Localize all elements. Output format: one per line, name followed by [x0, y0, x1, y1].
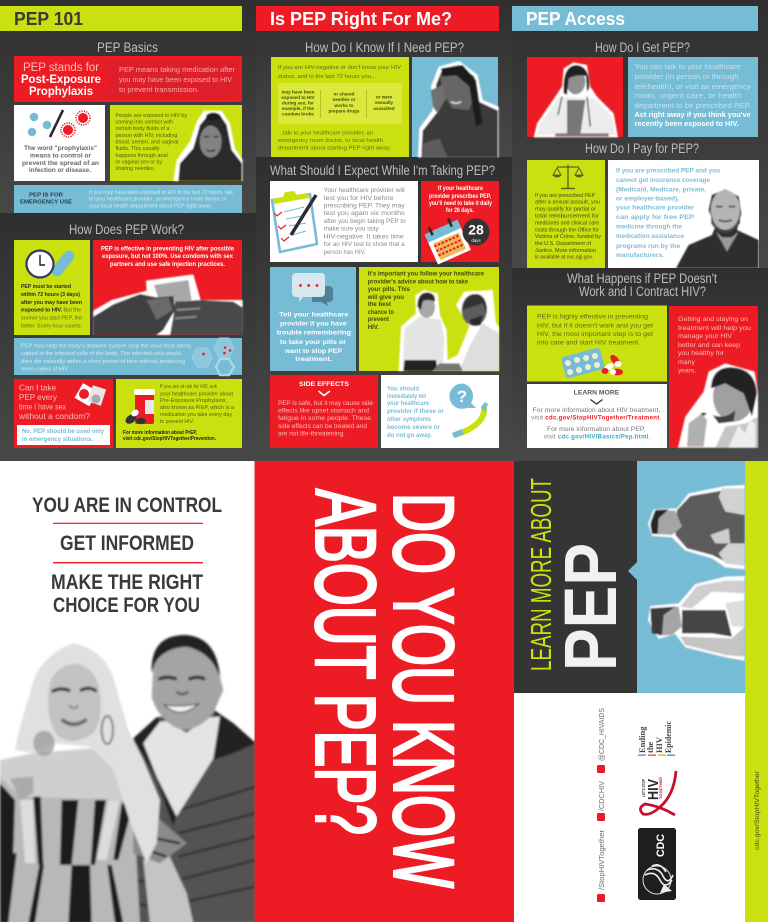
panel: side effects: are not life-threatening.	[278, 430, 345, 438]
panel: meaning of prophylaxis: prevent the spread of an	[22, 160, 99, 167]
panel: PrEP information: medication you take every day	[160, 412, 232, 418]
panel: side effects: PEP is safe, but it may cause side	[278, 400, 374, 407]
panel: sexual assault reimbursement: after a sexual assault, you	[535, 200, 600, 206]
panel: immune system: more copies of HIV.	[21, 366, 69, 372]
panel: 28 days: If your healthcare	[438, 186, 484, 192]
panel: staying on treatment	[669, 306, 758, 448]
panel: how do I know: may have been	[282, 90, 315, 94]
panel: how people are exposed: fluids. This usually	[116, 146, 160, 152]
text block: empowerment messages	[32, 494, 222, 617]
panel: tell provider about symptoms: become severe or	[387, 424, 441, 431]
heading: How Do I Know If I Need PEP?: How Do I Know If I Need PEP?	[305, 40, 464, 55]
panel: how people are exposed: blood, semen, and vaginal	[116, 140, 178, 146]
panel: effective but not 100 percent: PEP is effective in preventing HIV after possible	[101, 246, 234, 252]
panel: PEP stands for: PEP means taking medication after	[119, 67, 236, 74]
icon: condom packets	[75, 383, 106, 406]
panel: staying on treatment: you healthy for	[678, 350, 725, 357]
panel: 28 days: you'll need to take it daily	[429, 201, 493, 207]
icon: pill pack and capsules	[561, 347, 623, 379]
panel: how to get PEP: You can talk to your healthcare	[635, 64, 741, 71]
panel: sexual assault reimbursement: Justice. More information	[535, 248, 596, 254]
panel: do you know about PEP cover	[255, 461, 513, 922]
panel: follow provider advice: the best	[368, 301, 392, 308]
icon: chevron	[318, 391, 330, 396]
panel: testing: after you begin taking PEP to	[324, 218, 406, 225]
panel: tell provider about symptoms: You should	[387, 385, 419, 392]
panel: meaning of prophylaxis	[14, 105, 105, 181]
panel: how to get PEP: recently been exposed to HIV.	[635, 121, 739, 128]
text block: social media links: /CDCHIV	[597, 781, 606, 811]
heading: How Do I Get PEP?: How Do I Get PEP?	[595, 40, 690, 55]
panel: how do I know: or shared	[334, 92, 355, 96]
panel: PEP is for emergency use: PEP IS FOR	[29, 192, 63, 198]
icon: pill bottle and capsules	[124, 389, 155, 426]
panel: tell your provider: treatment.	[295, 356, 332, 363]
photo: two men seated	[648, 485, 745, 661]
heading: PEP 101: PEP 101	[14, 8, 83, 29]
panel: sexual assault reimbursement: Victims of Crime, funded by	[535, 234, 601, 240]
divider: red fold line	[254, 461, 256, 922]
heading: PEP Basics: PEP Basics	[97, 40, 158, 55]
panel: meaning of prophylaxis: infection or disease.	[29, 167, 91, 174]
panel: 28 days: for 28 days.	[446, 208, 474, 214]
panel: how people are exposed: person with HIV, including	[116, 133, 177, 139]
panel: staying on treatment: many	[678, 359, 696, 366]
panel: testing: Your healthcare provider will	[324, 187, 405, 194]
photo: hands exchanging a condom	[93, 274, 243, 335]
panel: free PEP medicine: medication assistance	[616, 233, 684, 240]
man shirt and head	[143, 717, 220, 817]
panel: learn more: LEARN MORE	[574, 390, 619, 396]
panel: testing	[270, 181, 418, 262]
panel: effective but not 100 percent: partners and use safe injection practices.	[110, 261, 225, 268]
background: dark panel sheet	[0, 0, 768, 461]
panel: follow provider advice: provider's advice about how to take	[368, 278, 468, 286]
heading: What Happens if PEP Doesn't Work: What Happens if PEP Doesn't	[567, 271, 717, 286]
heading: How Does PEP Work?: How Does PEP Work?	[69, 222, 184, 237]
icon: scales of justice	[553, 165, 583, 188]
panel: how do I know: assaulted	[373, 106, 395, 111]
icon: notch pointer	[628, 562, 637, 580]
heading: PEP Access	[512, 6, 758, 31]
panel: 72 hours: sooner you start PEP, the	[21, 316, 83, 322]
panel: tell provider about symptoms: do not go away.	[387, 432, 432, 439]
man jacket	[130, 709, 256, 922]
panel: sexual assault reimbursement	[527, 160, 605, 268]
panel: free PEP medicine	[608, 160, 759, 268]
panel: PEP 101	[0, 6, 243, 448]
panel: PEP stands for	[14, 56, 242, 102]
panel: PrEP information: to prevent HIV.	[160, 419, 194, 425]
heading: What Happens if PEP Doesn't Work: Work and I Contract HIV?	[579, 284, 706, 299]
panel: immune system: copied in the infected cells of the body. The infected cells would	[21, 351, 181, 357]
panel: how people are exposed: coming into contact with	[116, 120, 173, 126]
panel: PEP stands for: Prophylaxis	[29, 86, 93, 98]
panel: testing: prescribing PEP. They may	[324, 202, 406, 210]
panel: free PEP medicine: or employer-based),	[616, 196, 679, 202]
panel: side effects	[270, 375, 378, 448]
panel: how do I know: during sex, for	[282, 100, 314, 106]
panel: how do I know: status, and in the last 72 hours you...	[278, 74, 376, 80]
panel: sexual assault reimbursement: total reimbursement for	[535, 214, 599, 220]
panel: follow provider advice	[359, 267, 499, 371]
panel: follow provider advice: will give you	[367, 294, 404, 301]
panel: staying on treatment: Getting and staying on	[678, 316, 748, 323]
panel: lime side strip: cdc.gov/StopHIVTogether	[754, 770, 761, 850]
panel: follow provider advice: your pills. This	[368, 286, 410, 293]
panel: 72 hours: within 72 hours (3 days)	[20, 292, 80, 298]
panel: PrEP information: If you are at risk for HIV, ask	[160, 384, 217, 390]
panel: immune system: PEP may help the body's immune system stop the virus from being	[21, 343, 191, 349]
panel: learn more: For more information about HIV treatment,	[533, 408, 661, 414]
logo: Ending the HIV Epidemic: Epidemic	[663, 721, 673, 753]
panel: sexual assault reimbursement: If you are prescribed PEP	[535, 193, 595, 199]
logo: Ending the HIV Epidemic: HIV	[654, 736, 664, 753]
panel: free PEP medicine: manufacturers.	[616, 252, 664, 259]
panel: can I take PEP every time: Can I take	[19, 384, 57, 393]
panel: staying on treatment: manage your HIV	[678, 333, 733, 340]
title: PEP: PEP	[549, 543, 632, 671]
panel: how do I know: department about starting PEP right away.	[278, 146, 391, 152]
logo: Let's Stop HIV Together: HIV	[645, 779, 662, 800]
panel: can I take PEP every time: without a condom?	[18, 412, 91, 421]
panel: testing: person has HIV.	[324, 249, 366, 256]
icon: calendar and 28 days badge: days	[471, 238, 481, 243]
panel: get into care: PEP is highly effective in preventing	[537, 314, 648, 321]
panel: how people are exposed: sharing needles.	[116, 166, 155, 172]
panel: immune system	[14, 338, 242, 375]
panel: PrEP information: Pre-Exposure Prophylaxis,	[160, 398, 227, 404]
callout: no, emergency only: in emergency situations.	[22, 436, 93, 443]
panel: effective but not 100 percent: exposure, but not 100%. Use condoms with sex	[102, 253, 233, 260]
panel: free PEP medicine: cannot get insurance coverage	[616, 177, 710, 184]
panel: can I take PEP every time	[14, 379, 113, 448]
photo: doctor on red	[527, 57, 623, 137]
panel: how do I know: works to	[334, 103, 354, 108]
icon: clock and pill	[26, 250, 69, 278]
panel: PEP Access	[512, 6, 759, 448]
panel: you are in control cover	[0, 461, 256, 922]
text block: social media links: @CDC_HIVAIDS	[597, 708, 606, 761]
panel: 72 hours: better. Every hour counts.	[21, 324, 82, 330]
logo: Ending the HIV Epidemic: Ending	[637, 726, 647, 753]
heading: PEP Access: PEP Access	[526, 8, 625, 29]
panel: sexual assault reimbursement: is available at ovc.ojp.gov.	[535, 254, 593, 260]
panel: testing: test you for HIV before	[324, 195, 394, 202]
panel: free PEP medicine: (Medicaid, Medicare, private,	[616, 186, 706, 194]
panel: follow provider advice: HIV.	[368, 324, 379, 331]
icon: clipboard and pen	[272, 191, 317, 252]
panel: learn more: visit cdc.gov/HIV/Basics/Pep.html.	[544, 435, 651, 441]
panel: sexual assault reimbursement: medicines and clinical care	[535, 220, 599, 226]
logo: CDC and HHS	[638, 828, 676, 900]
panel: tell your provider: provider if you have	[280, 321, 347, 328]
panel: PEP is for emergency use	[14, 185, 242, 213]
panel: how do I know: ...talk to your healthcare provider, an	[278, 130, 373, 136]
panel: how do I know: or were	[376, 94, 393, 100]
panel: tell your provider: want to stop PEP	[284, 348, 342, 355]
panel: free PEP medicine: If you are prescribed PEP and you	[616, 168, 720, 174]
panel: side effects: side effects can be treated and	[278, 423, 367, 430]
panel: PrEP information: your healthcare provider about	[160, 392, 233, 398]
title: learn more about: LEARN MORE ABOUT	[526, 478, 558, 671]
panel: follow provider advice: chance to	[368, 309, 394, 316]
callout: no, emergency only: No, PEP should be used only	[22, 428, 104, 435]
panel: how do I know: prepare drugs	[329, 108, 360, 114]
panel: PEP is for emergency use: your local health department about PEP right away.	[89, 204, 212, 210]
logo: Ending the HIV Epidemic: the	[645, 741, 655, 753]
icon: calendar and 28 days badge: 28	[468, 222, 484, 238]
panel: learn more: visit cdc.gov/StopHIVTogether/Treatment.	[531, 416, 662, 422]
panel: how do I know: condom broke	[282, 112, 314, 116]
panel: follow provider advice: prevent	[368, 316, 390, 323]
panel: 72 hours	[14, 240, 90, 335]
panel: get into care: HIV, but if it doesn't work and you get	[537, 323, 653, 330]
logo: Let's Stop HIV Together	[640, 771, 676, 815]
photo: man taking a pill	[678, 363, 758, 448]
panel: PrEP information	[116, 379, 242, 448]
photo: couple portrait	[0, 635, 256, 922]
woman shoulders and dress	[0, 747, 147, 810]
heading: What Happens if PEP Doesn't Work	[567, 271, 717, 299]
panel: free PEP medicine: programs run by the	[616, 243, 680, 250]
panel: tell your provider: Tell your healthcare	[279, 312, 349, 319]
panel: learn more about PEP cover	[513, 461, 768, 922]
panel: how do I know: example, if the	[282, 106, 314, 111]
panel: how people are exposed	[110, 105, 243, 181]
panel: PrEP information: visit cdc.gov/StopHIVTogether/Prevention.	[123, 436, 217, 442]
icon: calendar and 28 days badge	[423, 215, 490, 265]
panel: staying on treatment: years.	[678, 368, 696, 374]
panel: PEP stands for: PEP stands for	[23, 62, 99, 74]
panel: PEP stands for: to prevent transmission.	[119, 87, 199, 94]
heading: Is PEP Right For Me?: Is PEP Right For Me?	[270, 8, 452, 29]
panel: meaning of prophylaxis: means to control or	[30, 152, 91, 160]
panel: tell provider about symptoms: provider if these or	[387, 408, 445, 415]
panel: testing: for an HIV test to show that a	[324, 241, 405, 248]
logo: CDC and HHS: CDC	[655, 834, 667, 857]
panel: how to get PEP: provider (in person or through	[635, 74, 739, 81]
text block: empowerment messages: YOU ARE IN CONTROL	[32, 494, 222, 517]
panel: effective but not 100 percent	[93, 240, 243, 335]
panel: how to get PEP: Act right away if you think you've	[635, 112, 751, 119]
panel: testing: make sure you stay	[324, 226, 379, 232]
panel: tell provider about symptoms: immediately tell	[387, 393, 426, 400]
panel: how do I know	[271, 57, 409, 157]
panel: 72 hours: after you may have been	[21, 300, 82, 306]
panel: tell provider about symptoms: other symptoms	[387, 416, 431, 423]
panel: sexual assault reimbursement: costs through the Office for	[535, 228, 599, 234]
panel: testing: HIV-negative. It takes time	[324, 234, 404, 240]
panel: learn more	[527, 384, 667, 448]
icon: question bubble and phone: ?	[457, 387, 467, 406]
panel: side effects: SIDE EFFECTS	[299, 381, 349, 388]
icon: chevron	[590, 400, 602, 404]
panel: how to get PEP: telehealth), or visit an emergency	[635, 84, 751, 91]
panel: PEP is for emergency use: If you may have been exposed to HIV in the last 72 hours, talk	[89, 190, 233, 196]
woman hair and face	[15, 643, 160, 863]
panel: tell your provider: to take your pills or	[280, 339, 346, 346]
panel: meaning of prophylaxis: The word "prophylaxis"	[24, 145, 97, 152]
panel: how do I know: If you are HIV-negative or don't know your HIV	[278, 65, 401, 71]
heading: Is PEP Right For Me?	[256, 6, 499, 31]
icon: hexagon cells	[192, 338, 234, 375]
panel: PEP is for emergency use: EMERGENCY USE	[20, 200, 72, 206]
panel: PrEP information: For more information about PrEP,	[123, 430, 198, 436]
text block: social media links: /StopHIVTogether	[597, 829, 606, 890]
panel: learn more: For more information about PEP,	[547, 427, 646, 433]
text block: empowerment messages: CHOICE FOR YOU	[53, 594, 200, 617]
text block: social media links	[597, 708, 606, 902]
panel: follow provider advice: It's important you follow your healthcare	[368, 271, 484, 278]
panel: how people are exposed: certain body fluids of a	[116, 126, 169, 132]
panel: can I take PEP every time: PEP every	[19, 393, 57, 402]
panel: how people are exposed: or vaginal sex or by	[116, 160, 163, 166]
text block: empowerment messages: MAKE THE RIGHT	[51, 571, 203, 594]
panel: testing: test you again six months	[324, 210, 405, 217]
panel: lime side strip	[745, 461, 768, 922]
panel: immune system: then die naturally within a short period of time without producing	[21, 359, 185, 365]
icon: prophylaxis dots and viruses	[28, 110, 90, 137]
logo: Ending the HIV Epidemic	[637, 721, 675, 756]
icon: speech bubbles	[292, 273, 333, 306]
photo: woman with hair bun	[173, 111, 243, 181]
panel: how to get PEP: room, urgent care, or health	[635, 93, 742, 100]
callout: no, emergency only	[17, 425, 110, 445]
panel: tell your provider: trouble remembering	[277, 330, 351, 337]
heading: PEP 101	[0, 6, 242, 31]
panel: can I take PEP every time: time I have sex	[19, 402, 66, 412]
panel: free PEP medicine: your healthcare provider	[616, 204, 694, 212]
panel: free PEP medicine: medicine through the	[616, 224, 682, 230]
panel: side effects: fatigue in some people. These	[278, 415, 372, 422]
panel: get into care: HIV, the most important step is to get	[537, 331, 653, 338]
photo: bald man with beard	[676, 189, 759, 268]
logo: Let's Stop HIV Together: LET'S STOP	[641, 779, 646, 797]
panel: how do I know: exposed to HIV	[281, 95, 316, 100]
panel: PEP stands for: Post-Exposure	[21, 74, 101, 86]
photo: man with dreadlocks on blue	[412, 57, 499, 157]
panel: Is PEP Right For Me	[256, 6, 499, 448]
text block: empowerment messages: GET INFORMED	[60, 532, 194, 555]
heading: What Should I Expect: What Should I Expect While I'm Taking PEP?	[270, 163, 495, 178]
panel: how people are exposed: People are exposed to HIV by	[116, 113, 187, 119]
panel: how do I know: needles or	[333, 97, 356, 102]
panel: tell your provider	[270, 267, 356, 371]
panel: free PEP medicine: can apply for free PEP	[616, 214, 695, 221]
panel: how to get PEP: department to be prescribed PEP.	[635, 103, 751, 110]
panel: sexual assault reimbursement: may qualify for partial or	[535, 206, 596, 212]
panel: sexual assault reimbursement: the U.S. Department of	[535, 241, 592, 247]
photo: provider and patient talking	[399, 290, 499, 371]
heading: How Do I Pay for PEP?: How Do I Pay for PEP?	[585, 141, 699, 156]
title: do you know about PEP	[298, 489, 470, 888]
panel: PrEP information: also known as PrEP, which is a	[160, 405, 235, 411]
panel: how do I know: emergency room doctor, or local health	[278, 138, 383, 144]
panel: PEP is for emergency use: to your healthcare provider, an emergency room doctor, or	[89, 197, 227, 203]
panel: side effects: effects like upset stomach and	[278, 408, 369, 414]
panel: 72 hours: PEP must be started	[21, 284, 71, 290]
panel: get into care	[527, 306, 667, 382]
panel: how to get PEP	[628, 57, 758, 137]
panel: 28 days: provider prescribes PEP,	[429, 194, 491, 200]
panel: staying on treatment: better and can keep	[678, 342, 740, 349]
panel: staying on treatment: treatment will help you	[678, 325, 751, 332]
panel: how people are exposed: happens through anal	[116, 153, 168, 159]
panel: PEP stands for: you may have been exposed to HIV	[119, 77, 232, 84]
panel: tell provider about symptoms	[381, 375, 499, 448]
panel: 72 hours: exposed to HIV. But the	[21, 308, 82, 314]
panel: 28 days	[421, 181, 499, 265]
logo: Let's Stop HIV Together: TOGETHER	[659, 777, 663, 799]
panel: get into care: into care and start HIV treatment.	[537, 340, 640, 347]
panel: how do I know: sexually	[375, 100, 394, 105]
panel: tell provider about symptoms: your healthcare	[387, 400, 429, 407]
